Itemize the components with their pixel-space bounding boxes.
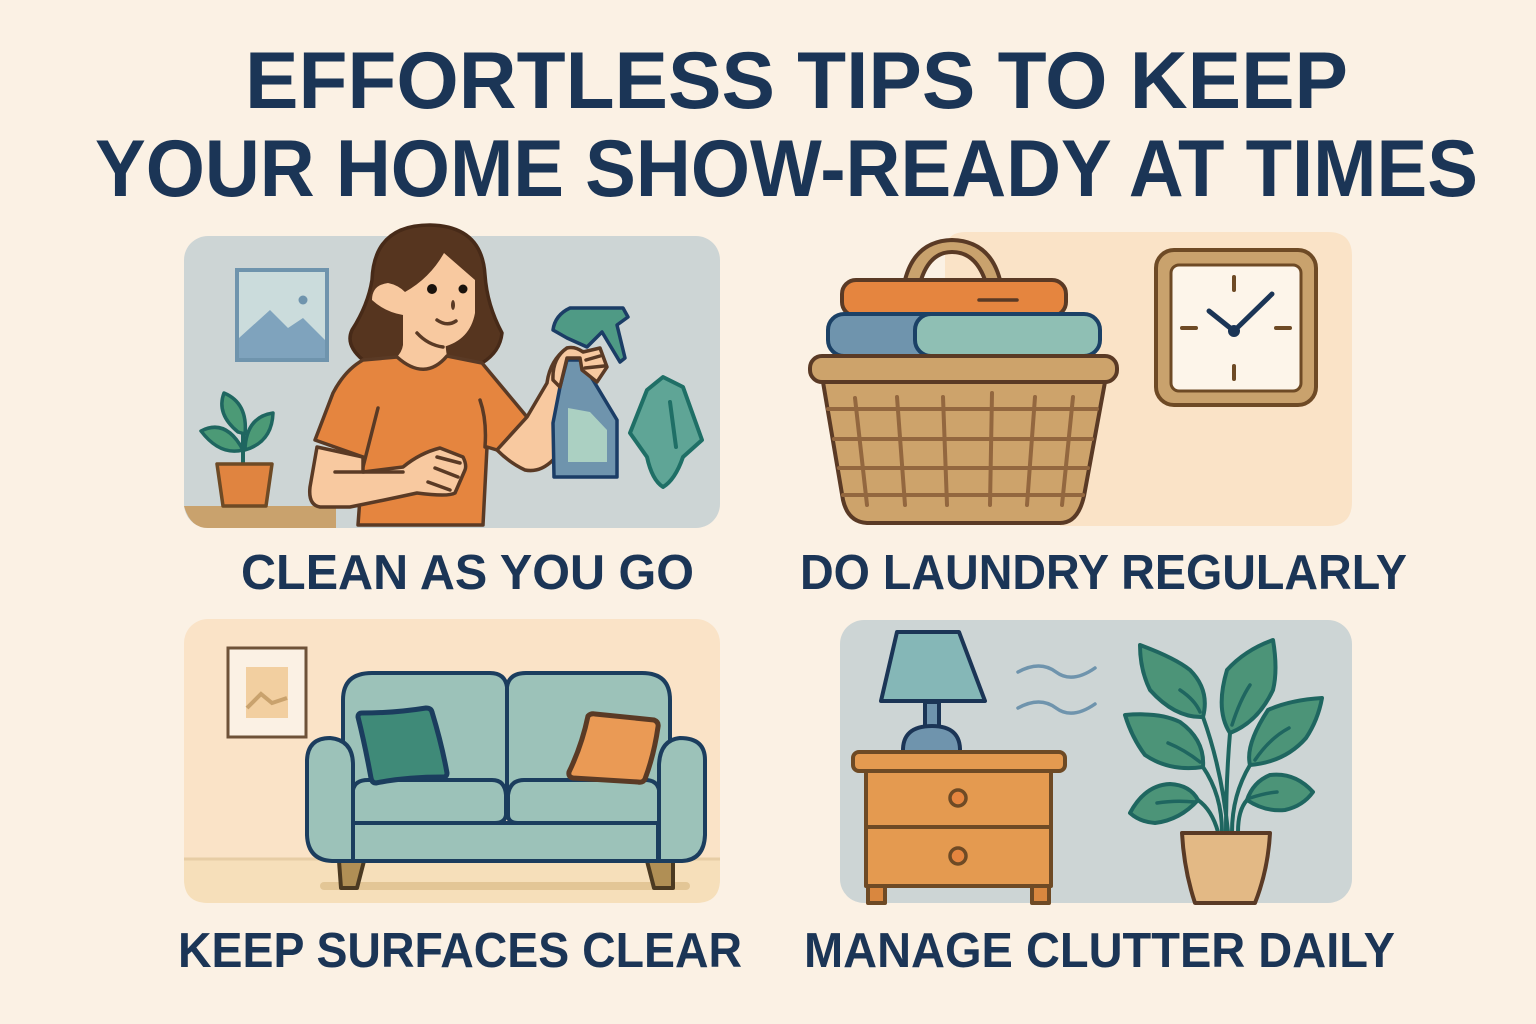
title bbox=[95, 36, 1478, 214]
label: do laundry regularly: DO LAUNDRY REGULARLY bbox=[800, 546, 1407, 600]
cushion: green bbox=[358, 708, 447, 783]
icon: spray bottle bbox=[553, 308, 628, 477]
icon: nightstand bbox=[853, 752, 1065, 903]
icon: cleaning cloth bbox=[630, 377, 702, 487]
icon: framed picture bbox=[228, 648, 306, 737]
shirt bbox=[315, 356, 527, 525]
icon: framed picture bbox=[237, 270, 327, 360]
face bbox=[372, 253, 475, 347]
icon: large potted plant bbox=[1125, 640, 1322, 903]
icon: potted plant bbox=[201, 393, 273, 506]
shelf bbox=[184, 506, 336, 528]
title: YOUR HOME SHOW-READY AT TIMES bbox=[95, 124, 1478, 214]
panel: clean as you go bbox=[184, 225, 720, 528]
label: manage clutter daily: MANAGE CLUTTER DAILY bbox=[804, 924, 1395, 978]
icon: sofa bbox=[307, 673, 705, 888]
arm: left bbox=[310, 447, 466, 507]
figure: woman bbox=[310, 225, 585, 525]
icon: laundry basket bbox=[810, 240, 1117, 523]
icon: lamp bbox=[881, 632, 985, 752]
title: EFFORTLESS TIPS TO KEEP bbox=[245, 36, 1348, 126]
panel: keep surfaces clear bbox=[184, 619, 720, 903]
neck bbox=[396, 315, 448, 370]
label: keep surfaces clear: KEEP SURFACES CLEAR bbox=[178, 924, 742, 978]
arm: right bbox=[497, 348, 585, 471]
icon: wall clock bbox=[1156, 250, 1316, 405]
panel: do laundry regularly bbox=[810, 232, 1352, 526]
shadow under sofa bbox=[320, 882, 690, 890]
panel: manage clutter daily bbox=[840, 620, 1352, 903]
hand on bottle bbox=[553, 348, 607, 387]
hair bbox=[350, 225, 502, 363]
cushion: orange bbox=[569, 714, 658, 782]
label: clean as you go: CLEAN AS YOU GO bbox=[241, 546, 694, 600]
icon: wavy lines bbox=[1018, 666, 1095, 713]
